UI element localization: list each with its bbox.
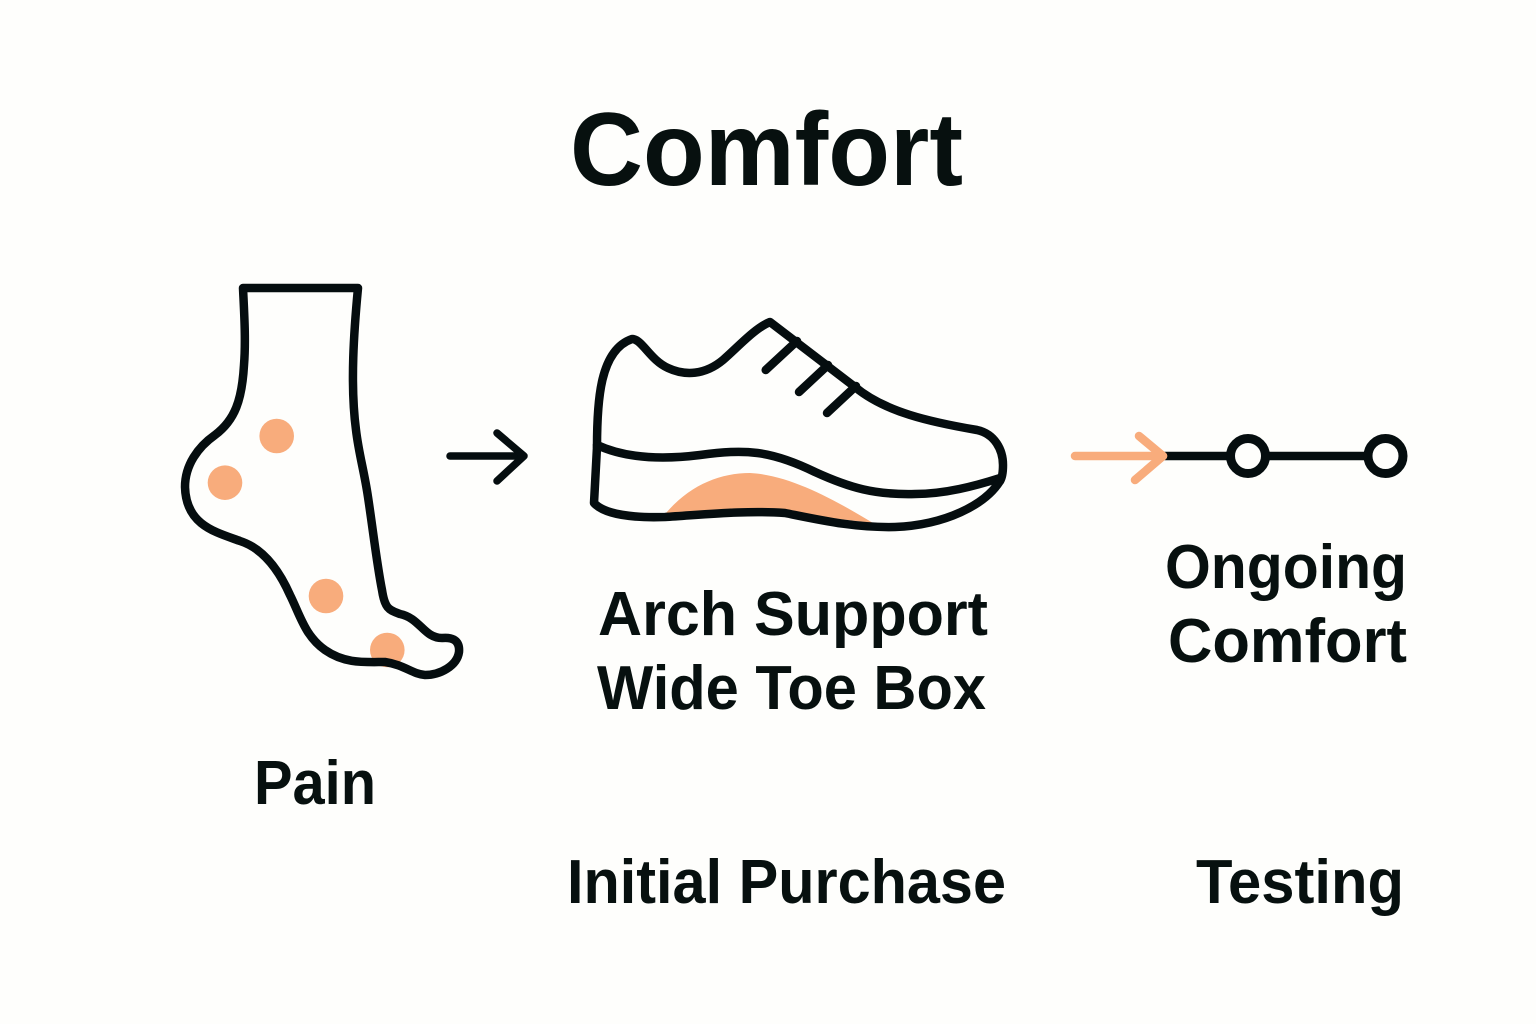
label: ongoing comfort: Comfort xyxy=(1168,607,1407,676)
icon: shoe with arch support xyxy=(594,322,1003,527)
label: arch support, wide toe box: Wide Toe Box xyxy=(597,654,986,723)
midsole line xyxy=(597,445,1000,494)
arrow: pain to shoe xyxy=(450,433,524,481)
timeline: arrow into ongoing comfort xyxy=(1075,436,1403,480)
foot outline xyxy=(185,288,459,675)
label: initial purchase: Initial Purchase xyxy=(567,848,1006,917)
pain point: arch xyxy=(309,579,343,613)
timeline line xyxy=(1165,452,1385,460)
orange arrow xyxy=(1075,436,1163,480)
title: Comfort xyxy=(570,92,963,208)
icon: foot with pain points xyxy=(185,288,459,675)
outsole xyxy=(594,447,1000,527)
timeline node 2 xyxy=(1368,438,1403,474)
label: arch support, wide toe box xyxy=(597,580,988,723)
label: ongoing comfort xyxy=(1165,533,1407,676)
shoe upper xyxy=(597,322,1003,481)
label: pain: Pain xyxy=(254,749,376,818)
pain point: ankle xyxy=(259,419,294,453)
label: arch support, wide toe box: Arch Support xyxy=(598,580,988,649)
arch support insert xyxy=(666,473,873,523)
laces xyxy=(766,341,797,370)
pain point: heel xyxy=(208,465,242,500)
label: ongoing comfort: Ongoing xyxy=(1165,533,1407,602)
pain point: toes xyxy=(370,633,405,667)
label: testing: Testing xyxy=(1196,848,1404,917)
timeline node 1 xyxy=(1230,438,1266,474)
